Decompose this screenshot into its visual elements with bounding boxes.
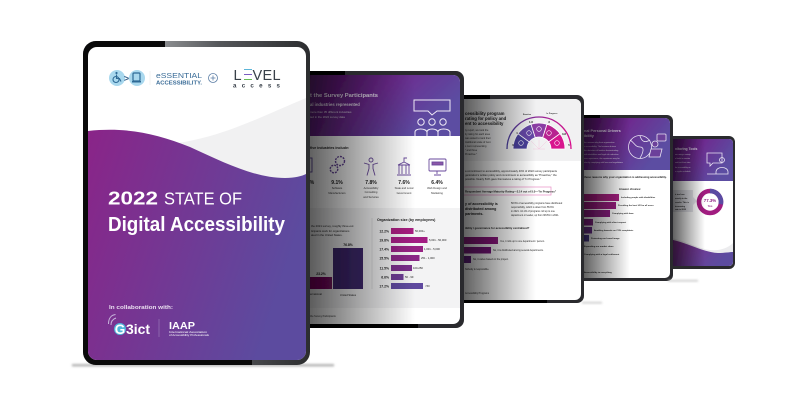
top panel background xyxy=(486,99,581,161)
icon: monitor partial xyxy=(310,158,312,172)
bar chart: answer choices: Providing the best UX for all users xyxy=(618,204,655,207)
logo: G3ict: G xyxy=(115,322,125,337)
header title and subtitle xyxy=(310,93,378,119)
bar chart: governance: No, it varies based on the project. xyxy=(473,258,509,261)
floor shadow under tablet 3 xyxy=(582,302,602,304)
gauge chart: maturity rating xyxy=(507,113,571,149)
bar chart: governance: No, it is distributed among several departments. xyxy=(493,249,544,252)
commitment paragraph: ganization's written policy and commitment to accessibility as "Proactive," the xyxy=(465,173,557,177)
tablet 3: maturity program page xyxy=(464,95,584,303)
plus icon xyxy=(208,74,218,82)
bar chart: organization size: 50 - 99 xyxy=(405,275,414,279)
logo: level access: access xyxy=(233,82,281,90)
industries heading: five industries include: xyxy=(310,146,349,150)
industry labels: Web Design and xyxy=(427,186,447,190)
logo: IAAP: International Association xyxy=(169,331,208,334)
gauge chart: maturity rating: 0 xyxy=(512,143,514,147)
right paragraph: 58.6% of accessibility programs have distributed xyxy=(511,202,563,205)
header text xyxy=(675,147,697,173)
icon: globe with person and laptop xyxy=(628,134,666,158)
bar chart: organization size: 1,001 - 5,000 xyxy=(424,247,440,251)
bar chart: organization size: Organization size (by employees) xyxy=(377,218,436,222)
bar chart: answer choices: Complying with a legal settlement xyxy=(584,253,620,256)
gauge chart: maturity rating: 3.8 xyxy=(562,132,566,136)
bar chart: location: United States xyxy=(340,293,357,297)
donut chart 77.3% yes xyxy=(699,191,721,213)
bar chart: organization size: 6.6% xyxy=(381,276,389,280)
bar chart: organization size: 12.2% xyxy=(379,230,389,234)
right paragraph xyxy=(511,202,563,217)
icon: gears xyxy=(330,156,344,173)
gauge chart: maturity rating: Reactive xyxy=(523,113,532,116)
subheading: distributed responsibility: partments. xyxy=(465,212,483,216)
footer note: the Survey Participants xyxy=(310,315,336,318)
header title and text: with disabilities and legal risk reduction xyxy=(584,153,618,156)
callout: average maturity rating xyxy=(452,187,557,195)
industry labels xyxy=(328,187,447,198)
logo: essential accessibility: eSSENTIAL xyxy=(156,71,202,80)
right paragraph: department or leader, up from 38.8% in 2021. xyxy=(511,214,559,217)
industry labels: Consulting xyxy=(365,190,378,194)
industry percentages: 7.6% xyxy=(398,180,410,186)
header title and text: is accessibility. The business drivers xyxy=(584,145,616,148)
intro text: " and three xyxy=(465,149,478,152)
industry labels: Government xyxy=(397,191,412,195)
question: these reasons why your organization is addressing accessibility. xyxy=(584,175,667,179)
gauge chart: maturity rating: 1.6 xyxy=(529,120,533,124)
bar chart: answer choices: Accessibility to everything xyxy=(584,271,612,274)
commitment paragraph: possible. Nearly 81% gave themselves a rating of "In Progress." xyxy=(465,177,541,181)
logo: IAAP xyxy=(169,320,210,337)
gauge chart: maturity rating: 3 xyxy=(548,120,550,124)
header title and text: the reasons why their organization xyxy=(584,141,614,144)
logo: level access xyxy=(233,68,281,90)
section heading xyxy=(465,111,507,126)
header title and text: nal Personal Drivers xyxy=(584,129,621,133)
bar chart: answer choices: Including people with disabilities xyxy=(621,196,656,199)
tablet 2: survey participants page xyxy=(310,71,464,328)
logo: level access: E xyxy=(262,68,272,84)
header title and text xyxy=(584,129,623,164)
subheading: distributed responsibility: y of accessibility is xyxy=(465,202,498,206)
icon: group of people with speech bubble xyxy=(414,100,450,136)
bar chart: organization size: 11.5% xyxy=(380,266,389,270)
gray wave xyxy=(178,98,306,190)
title xyxy=(108,188,286,236)
bar chart: organization size: 17.4% xyxy=(379,248,389,252)
industry labels: Manufacturers xyxy=(328,191,346,195)
question: ibility / governance for accessibility centralized? xyxy=(465,226,530,230)
logo: essential accessibility xyxy=(109,70,202,86)
location text: ticipants work for organizations xyxy=(311,229,350,233)
industry percentages: 9.1% xyxy=(331,180,343,186)
header text: nitoring Tools xyxy=(675,147,697,151)
callout text with arrow: mostly in the xyxy=(675,197,688,200)
bar chart: location xyxy=(310,244,363,296)
logo: essential accessibility: ACCESSIBILITY. xyxy=(156,80,202,86)
industry labels: Accessibility xyxy=(364,186,379,190)
header text: are using a variety xyxy=(675,153,691,156)
header text: and test their sites xyxy=(675,161,690,164)
header title and text: also by complying with laws and regulations xyxy=(584,161,623,164)
header band xyxy=(673,139,733,181)
section heading: ent to accessibility xyxy=(465,121,504,126)
header title and text: user experience, the experience may be xyxy=(584,157,620,160)
footer note: Accessibility Programs xyxy=(465,292,490,295)
callout text with arrow: ir tool use xyxy=(675,193,685,196)
logo: IAAP: of Accessibility Professionals xyxy=(169,334,210,337)
intro text: ity rating for each area xyxy=(465,133,490,136)
header title and subtitle: ted in the 2022 survey data xyxy=(310,115,345,119)
location text: the 2021 survey, roughly three-out xyxy=(311,224,354,228)
commitment paragraph xyxy=(465,170,557,180)
header text: for accessibility on xyxy=(675,166,690,169)
bar chart: organization size: 50,000+ xyxy=(415,229,425,233)
header text: a regular schedule xyxy=(675,170,691,173)
bar chart: answer choices: Avoiding lawsuits on CCH complaints xyxy=(594,229,634,232)
bar chart: answer choices: Expanding our market share xyxy=(584,245,614,248)
right paragraph: responsibility, which is down from 55.6% xyxy=(511,206,555,209)
icon: person with speech bubble xyxy=(707,153,728,174)
header title and subtitle: al industries represented xyxy=(310,102,360,107)
tablet 5: monitoring tools page xyxy=(673,136,735,269)
logo: level access: L xyxy=(272,68,281,84)
bar chart: location: 23.2% xyxy=(316,272,326,276)
intro text: s zero representing xyxy=(465,145,487,148)
intro text: Proactive." xyxy=(465,153,477,156)
location text: ated in the United States. xyxy=(311,233,343,237)
industry labels: State and Local xyxy=(395,186,414,190)
intro text: traditional scale of zero xyxy=(465,141,491,144)
donut chart 77.3% yes: 77.3% xyxy=(704,198,716,203)
bar chart: location: ernational xyxy=(310,292,322,296)
gauge chart: maturity rating: 1 xyxy=(516,131,518,135)
commitment paragraph: a commitment to accessibility, approximately 40% of 2022 survey participants xyxy=(465,169,558,173)
purple cover panel with wave xyxy=(88,130,306,360)
industry percentages xyxy=(310,180,443,184)
bar chart: answer choices xyxy=(584,188,656,274)
section heading: cessibility program xyxy=(465,111,505,116)
bar chart: organization size: <50 xyxy=(425,284,430,288)
gauge chart: maturity rating: In Progress xyxy=(546,113,558,115)
icon: government building xyxy=(397,158,411,175)
bar chart: governance xyxy=(464,237,545,270)
tablet 1: cover page xyxy=(83,41,310,365)
bar chart: answer choices: Answer choices: xyxy=(619,187,641,191)
header band xyxy=(310,75,460,136)
header title and subtitle: t the Survey Participants xyxy=(310,93,378,99)
callout text with arrow: increasing xyxy=(675,206,686,208)
callout text with arrow: results. This is xyxy=(675,201,690,204)
bar chart: organization size: 5,001 - 50,000 xyxy=(429,238,447,242)
industry labels: and Services xyxy=(363,195,379,199)
callout text with arrow xyxy=(673,190,696,212)
title: 2022 xyxy=(108,188,158,208)
donut chart 77.3% yes: Yes xyxy=(708,204,713,208)
header title and subtitle: more than 35 different industries xyxy=(310,110,352,114)
floor shadow under cover tablet xyxy=(72,364,334,366)
header title and text: the decisions of leaders demonstrating xyxy=(584,149,618,152)
title: Digital Accessibility xyxy=(108,214,286,236)
bar chart: organization size xyxy=(377,218,447,289)
floor shadow under tablet 4 xyxy=(668,280,698,282)
lower panel background xyxy=(361,208,460,308)
logo: essential accessibility: > xyxy=(124,74,129,84)
bar chart: organization size: 19.8% xyxy=(379,238,389,242)
bar chart: answer choices: Complying with client request xyxy=(595,221,626,224)
logo: G3ict xyxy=(108,314,151,337)
icon: accessibility figure xyxy=(364,158,378,176)
bar chart: organization size: 100-250 xyxy=(413,266,423,270)
industry percentages: % xyxy=(310,180,315,186)
tablet 4: organizational drivers page xyxy=(584,115,673,281)
icon: web monitor xyxy=(429,159,446,175)
industry percentages: 6.4% xyxy=(431,180,443,186)
logo: IAAP: IAAP xyxy=(169,320,195,332)
bar chart: governance: Nobody is responsible. xyxy=(465,268,490,271)
subheading: distributed responsibility: distributed among xyxy=(465,207,496,211)
bar chart: governance: Yes, it rolls up to one department / person. xyxy=(500,240,545,243)
title: STATE OF xyxy=(164,188,242,208)
screen xyxy=(88,47,306,360)
intro text: ty report, we took the xyxy=(465,129,489,132)
location text xyxy=(311,225,354,236)
industry labels: Marketing xyxy=(431,191,443,195)
callout: average maturity rating: Respondent Average Maturity Rating—2.14 out of 5.0—"In Progress" xyxy=(465,190,557,194)
logo: level access: V xyxy=(252,68,262,84)
subheading: distributed responsibility xyxy=(465,202,498,216)
logo: G3ict: 3ict xyxy=(126,322,151,337)
header text: of tools to monitor xyxy=(675,157,690,160)
bar chart: organization size: 17.2% xyxy=(379,284,389,288)
right paragraph: in 2021. 44.1% of programs roll up to one xyxy=(511,210,556,213)
header band xyxy=(584,118,670,170)
bezel xyxy=(83,41,310,365)
logo: level access: L xyxy=(234,68,242,84)
industry labels: Software xyxy=(332,186,343,190)
bar chart: organization size: 15.5% xyxy=(379,256,389,260)
header title and text: ibility xyxy=(584,134,595,138)
section heading: rating for policy and xyxy=(465,116,507,121)
industry percentages: 7.8% xyxy=(365,180,377,186)
wave footer xyxy=(675,239,733,266)
bar chart: location: 76.8% xyxy=(343,243,353,247)
bar chart: answer choices: Protecting our brand image xyxy=(591,237,620,240)
gauge chart: maturity rating: 5 xyxy=(568,143,570,147)
collaboration label: In collaboration with: xyxy=(109,305,173,311)
callout text with arrow: rate in 2022 xyxy=(675,208,687,211)
intro text: was asked to rank their xyxy=(465,137,491,140)
bar chart: answer choices: Complying with laws xyxy=(612,212,634,215)
intro text xyxy=(465,129,491,156)
bar chart: organization size: 251 - 1,000 xyxy=(421,256,435,260)
